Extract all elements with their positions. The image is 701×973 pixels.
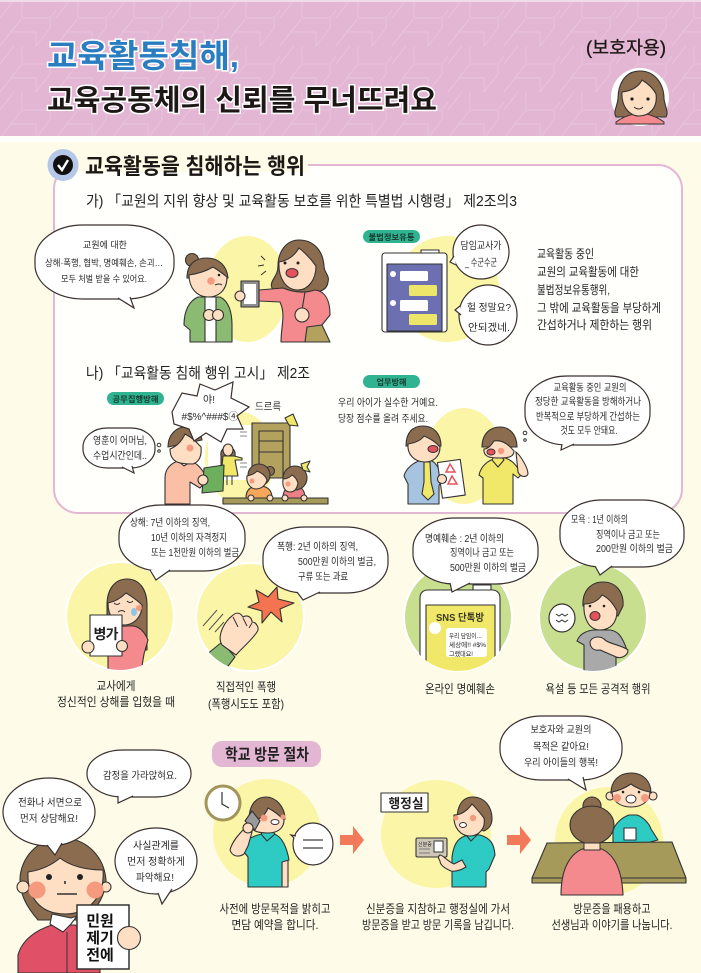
callout: reaction: 안되겠네. bbox=[468, 322, 510, 334]
callout: consult first: 전화나 서면으로 bbox=[18, 797, 82, 809]
law citation ga: 가) 「교원의 지위 향상 및 교육활동 보호를 위한 특별법 시행령」 제2조의3 bbox=[86, 193, 517, 210]
illustration: parent storming classroom bbox=[165, 412, 328, 504]
title: 교육공동체의 신뢰를 무너뜨려요 bbox=[47, 84, 437, 117]
callout: gossip: _ 수군수군 bbox=[464, 257, 497, 269]
callout: defamation penalty bbox=[413, 518, 538, 592]
badge: obstruction of duty bbox=[107, 392, 164, 405]
callout: assault penalty: 폭행: 2년 이하의 징역, bbox=[277, 540, 358, 553]
callout: injury penalty: 상해: 7년 이하의 징역, bbox=[130, 516, 210, 529]
badge: work obstruction bbox=[363, 375, 420, 388]
illustration: large parent with sign: 민원 bbox=[86, 913, 114, 930]
callout: same goal: 목적은 같아요! bbox=[533, 741, 589, 753]
callout: check facts: 사실관계를 bbox=[133, 840, 179, 852]
text: step 1: 면담 예약을 합니다. bbox=[232, 917, 318, 932]
section heading: 교육활동을 침해하는 행위 bbox=[85, 154, 305, 179]
callout: assault penalty: 500만원 이하의 벌금, bbox=[298, 555, 376, 568]
callout: repeated interference: 것도 모두 안돼요. bbox=[560, 425, 618, 437]
callout: calm down: 감정을 가라앉혀요. bbox=[103, 770, 177, 782]
callout: repeated interference: 반복적으로 부당하게 간섭하는 bbox=[536, 410, 640, 423]
callout: teacher insults: 교원에 대한 bbox=[83, 240, 127, 250]
callout: check facts: 파악해요! bbox=[136, 871, 174, 884]
illustration: parent demanding grade change bbox=[404, 408, 528, 504]
label: assault: 직접적인 폭행 bbox=[216, 679, 276, 694]
label: verbal abuse: 욕설 등 모든 공격적 행위 bbox=[546, 681, 650, 696]
badge: obstruction of duty: 공무집행방해 bbox=[112, 394, 158, 404]
callout: angry shout: 야! bbox=[203, 394, 215, 406]
panel: injury: 병가 bbox=[94, 626, 119, 642]
arrow bbox=[507, 826, 531, 854]
callout: class time: 수업시간인데.. bbox=[93, 449, 147, 462]
callout: calm down bbox=[87, 750, 191, 803]
law citation na: 나) 「교육활동 침해 행위 고시」 제2조 bbox=[86, 365, 310, 382]
callout: same goal bbox=[500, 716, 622, 790]
text: step 2: 방문증을 받고 방문 기록을 남깁니다. bbox=[362, 918, 514, 932]
callout: defamation penalty: 명예훼손 : 2년 이하의 bbox=[425, 532, 504, 545]
panel: online defamation bbox=[403, 574, 513, 672]
badge: work obstruction: 업무방해 bbox=[376, 377, 406, 387]
callout: check facts bbox=[115, 828, 197, 904]
panel: verbal abuse bbox=[539, 563, 647, 675]
callout: check facts: 먼저 정확하게 bbox=[127, 855, 185, 868]
title bbox=[47, 38, 437, 117]
heading: school visit procedure: 학교 방문 절차 bbox=[225, 746, 309, 764]
text: description of illegal distribution: 그 밖에 교육활동을 부당하게 bbox=[537, 301, 661, 315]
step 2: administration office: 신분증 bbox=[418, 841, 432, 848]
panel: online defamation: 우리 담임이… bbox=[449, 631, 482, 640]
callout: insult penalty bbox=[560, 500, 684, 575]
badge: illegal information: 불법정보유통 bbox=[368, 232, 414, 242]
panel: assault bbox=[196, 563, 304, 671]
panel: injury bbox=[66, 562, 174, 672]
text: step 2: 신분증을 지참하고 행정실에 가서 bbox=[366, 901, 510, 916]
callout: angry shout: #$%^###$④ bbox=[182, 411, 238, 423]
text: step 2 bbox=[362, 901, 514, 932]
label: defamation: 온라인 명예훼손 bbox=[425, 682, 495, 696]
text: step 3: 방문증을 패용하고 bbox=[574, 902, 650, 916]
label: injury: 정신적인 상해를 입혔을 때 bbox=[57, 695, 175, 709]
text: parent demand: 당장 점수를 올려 주세요. bbox=[338, 413, 428, 425]
icon: parent avatar bbox=[611, 68, 669, 126]
callout: repeated interference: 교육활동 중인 교원의 bbox=[554, 381, 626, 394]
callout: teacher insults: 모두 처벌 받을 수 있어요. bbox=[61, 273, 147, 284]
text: step 3: 선생님과 이야기를 나눕니다. bbox=[552, 918, 672, 932]
header band bbox=[0, 0, 701, 136]
sound effect: 드르륵 bbox=[255, 401, 281, 413]
callout: injury penalty: 10년 이하의 자격정지 bbox=[151, 531, 227, 544]
callout: repeated interference: 정당한 교육활동을 방해하거나 bbox=[535, 395, 641, 408]
callout: teacher insults: 상해·폭행, 협박, 명예훼손, 손괴… bbox=[45, 257, 163, 268]
callout: reaction: 헐 정말요? bbox=[467, 301, 511, 314]
text: step 1: 사전에 방문목적을 밝히고 bbox=[220, 902, 330, 916]
callout: teacher insults bbox=[35, 225, 174, 308]
callout: speech lines bbox=[291, 823, 333, 865]
callout: assault penalty: 구류 또는 과료 bbox=[298, 571, 348, 583]
callout: reaction bbox=[455, 285, 517, 345]
panel: online defamation: 세상에!! #$% bbox=[449, 640, 486, 649]
callout: same goal: 우리 아이들의 행복! bbox=[524, 757, 598, 769]
callout: insult penalty: 징역이나 금고 또는 bbox=[596, 529, 660, 541]
title: 교육활동침해, bbox=[47, 38, 239, 74]
label: assault bbox=[208, 679, 284, 711]
illustration: large parent with sign: 전에 bbox=[86, 947, 114, 964]
step 3: talking with teacher bbox=[532, 773, 686, 895]
callout: class time: 영훈이 어머님, bbox=[93, 434, 147, 447]
panel: online defamation: SNS 단톡방 bbox=[436, 611, 484, 624]
step 2: administration office: 행정실 bbox=[388, 796, 424, 811]
illustration: phone chat bbox=[382, 236, 499, 342]
callout: gossip: 담임교사가 bbox=[460, 239, 502, 252]
label: injury bbox=[57, 679, 175, 709]
callout: assault penalty bbox=[263, 527, 388, 600]
callout: class time bbox=[83, 428, 161, 473]
icon: check mark bbox=[48, 149, 78, 181]
step 2: administration office bbox=[381, 780, 495, 888]
callout: same goal: 보호자와 교원의 bbox=[530, 724, 592, 736]
panel: online defamation: 그랬대요! bbox=[449, 650, 473, 658]
illustration: large parent with sign bbox=[17, 838, 140, 973]
callout: insult penalty: 모욕 : 1년 이하의 bbox=[571, 513, 628, 526]
illustration: large parent with sign: 제기 bbox=[86, 930, 114, 947]
text: description of illegal distribution: 교원의 교육활동에 대한 bbox=[537, 265, 639, 279]
text: parent demand bbox=[338, 397, 438, 425]
text: parent demand: 우리 아이가 실수한 거예요. bbox=[338, 397, 438, 409]
text: step 3 bbox=[552, 902, 672, 932]
arrow bbox=[340, 826, 364, 854]
panel: acts infringing on education bbox=[50, 160, 682, 513]
badge: illegal information bbox=[363, 230, 420, 243]
callout: insult penalty: 200만원 이하의 벌금 bbox=[596, 542, 673, 555]
callout: repeated interference bbox=[525, 376, 650, 450]
label: injury: 교사에게 bbox=[96, 679, 136, 693]
text: description of illegal distribution: 간섭하거나 제한하는 행위 bbox=[537, 317, 652, 332]
callout: defamation penalty: 징역이나 금고 또는 bbox=[450, 547, 514, 559]
callout: defamation penalty: 500만원 이하의 벌금 bbox=[450, 561, 526, 574]
text: description of illegal distribution: 불법정보유통행위, bbox=[537, 282, 610, 297]
step 1: phone appointment bbox=[206, 779, 321, 887]
callout: injury penalty bbox=[119, 505, 245, 580]
text: description of illegal distribution bbox=[537, 247, 661, 332]
callout: consult first bbox=[3, 778, 95, 855]
label: assault: (폭행시도도 포함) bbox=[208, 696, 284, 711]
callout: gossip bbox=[450, 225, 509, 279]
heading: school visit procedure bbox=[212, 741, 321, 767]
text: description of illegal distribution: 교육활동 중인 bbox=[537, 247, 594, 261]
callout: consult first: 먼저 상담해요! bbox=[20, 812, 78, 825]
audience label: (보호자용) bbox=[586, 38, 666, 58]
text: step 1 bbox=[220, 902, 330, 932]
illustration: parent confronting teacher with phone bbox=[184, 236, 330, 342]
callout: angry shout bbox=[172, 382, 249, 442]
callout: injury penalty: 또는 1천만원 이하의 벌금 bbox=[151, 546, 239, 559]
